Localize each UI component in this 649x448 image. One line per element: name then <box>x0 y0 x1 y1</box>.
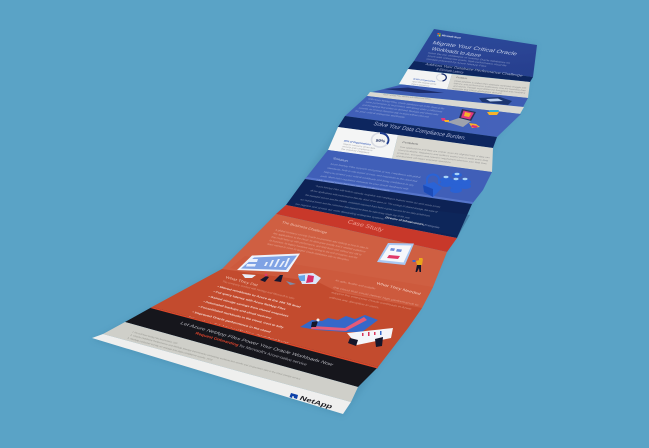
attribution <box>385 216 441 229</box>
solution text: a fully managed service that keeps data safe and always available. <box>316 178 392 192</box>
panel: hero header <box>414 29 537 77</box>
solution text: help you protect your critical workloads and bring confidence to any <box>323 170 416 187</box>
solution text: audit. Meet strict regulatory demands for your Oracle databases with <box>320 174 410 191</box>
problem text <box>452 76 527 95</box>
problem text: cost you dearly. Regulators and auditors expect you to meet every data <box>398 149 489 162</box>
quote text: the managed service and the reliable, consistent response have been a great success for our data architecture, <box>305 193 432 218</box>
cta line: Request Onboarding for Microsoft's Azure-native service <box>195 331 308 367</box>
stat text <box>411 77 437 88</box>
panel: footnotes: 3. NetApp customer survey on storage and data compliance results, 2019 <box>127 336 214 361</box>
folded infographic page <box>92 29 537 414</box>
logo: NetApp: NetApp <box>298 394 335 410</box>
needed text <box>329 279 420 311</box>
subtitle: Azure with enterprise-grade, high-performance cloud file <box>427 54 508 67</box>
subtitle: Solve the top challenges of running Oracle databases on <box>427 51 512 65</box>
body text: its business. Its legacy hardware was coming to the end of support, and the <box>269 239 359 259</box>
body text: for your critical enterprise workloads. <box>355 109 407 119</box>
stat text: security and compliance in <box>342 145 374 152</box>
body text: seconds, so recovery objectives stay on target without extra cost <box>358 106 430 118</box>
stat text: impact operations <box>411 83 431 88</box>
stat text: report slow database queries <box>412 80 437 86</box>
attribution: Director of Infrastructure, <box>385 216 426 226</box>
panel: footnotes <box>103 322 358 402</box>
bullet list: RU numbers: Cut data transfer time, about three hours <box>188 316 290 345</box>
stat text: Report concerns about data <box>343 143 377 150</box>
quote text: our regions and across our most demanding enterprise systems." <box>295 202 386 221</box>
panel: lower orange sheet <box>152 214 447 367</box>
problem text: Cloud adoption is stalled when database workloads struggle with <box>454 80 527 90</box>
panel: performance banner: & Eliminate Latency <box>436 67 465 74</box>
panel: solution <box>305 150 492 204</box>
panel: what they did / needed <box>188 273 422 347</box>
panel: compliance stat and problem <box>328 127 493 172</box>
panel: folded grey strip <box>367 92 524 114</box>
panel: performance banner <box>408 61 533 82</box>
problem text: Problem <box>456 76 469 80</box>
bullet list: • Automated backups and cloud recovery <box>203 300 273 320</box>
panel: performance stat and problem <box>399 69 530 98</box>
panel: case study banner: Case Study <box>346 219 385 233</box>
icon: donut <box>436 74 446 81</box>
title: Workloads to Azure <box>430 47 483 59</box>
body text: same performance as on-premises, with latency under a millisecond <box>365 100 443 113</box>
solution text: Azure NetApp Files supports encryption at rest, compliance with global <box>330 162 422 179</box>
needed text: support the enterprise Oracle workloads in Azure <box>331 291 413 311</box>
bullet list: • Cut query latency with Azure NetApp Files <box>213 290 287 311</box>
quote text: our regional teams and the customers that depend on them for data every single day of the year. <box>300 198 412 219</box>
illustration: presenter <box>412 258 423 272</box>
quote text <box>295 184 442 221</box>
bullet list: • Moved workloads to Azure at the 100 TB level <box>217 285 302 309</box>
logo label: Microsoft Azure <box>441 34 462 39</box>
body text: and throughput that scales on demand. Backups and clones take <box>362 103 440 116</box>
body text: team wanted to move its largest Oracle databases with no disruption. <box>267 242 351 262</box>
problem text <box>396 141 491 165</box>
problem text: latency, and performance bottlenecks cost the business time <box>453 82 527 92</box>
stat text: 90% of Organizations <box>343 139 372 146</box>
solution text <box>316 162 422 192</box>
solution heading: Solution <box>332 157 349 163</box>
body text: key applications to the cloud. Its data grew quickly and it needed a platform <box>273 232 367 253</box>
panel: business challenge <box>237 220 423 272</box>
bullet list <box>188 280 302 345</box>
illustration: strip graphic <box>479 97 512 105</box>
panel: call to action <box>125 307 378 387</box>
problem text: response that critical applications demand. <box>452 87 503 95</box>
icon: laptop <box>441 109 499 128</box>
bullet list: • Gained storage savings from shared snapshots <box>208 295 290 318</box>
heading: what they needed: What They Needed <box>376 281 422 296</box>
body text <box>355 97 446 119</box>
panel: compliance banner <box>338 116 497 148</box>
heading: The Business Challenge <box>281 220 328 235</box>
panel: performance banner: Address Your Database Performance Challenge <box>425 62 524 77</box>
icon: 90% donut <box>372 133 389 147</box>
heading: what they did: What They Did <box>225 275 259 287</box>
needed text: An agile, flexible and scalable <box>335 279 377 290</box>
title: Migrate Your Critical Oracle <box>431 41 519 57</box>
cta headline: Let Azure NetApp Files Power Your Oracle Workloads Now <box>179 321 334 368</box>
illustration: tablet <box>377 243 414 265</box>
problem text: and money. Storage must deliver the throughput and consistent <box>453 85 526 95</box>
body text: With Azure NetApp Files, Oracle databases run in the cloud at the <box>368 97 446 110</box>
problem text: Problem <box>402 141 419 146</box>
bullet list: • Improved Oracle performance in the cloud <box>192 310 272 334</box>
page shadow <box>92 29 537 416</box>
icon: NetApp mark <box>290 393 298 399</box>
icon: lock and data stacks <box>423 172 471 197</box>
problem text: Your applications and data are critical. Even the slightest loss of data can <box>399 146 491 159</box>
small people row <box>242 273 321 285</box>
stat text <box>341 139 377 154</box>
body text <box>267 228 370 262</box>
panel: compliance banner: Solve Your Data Compliance Burden. <box>372 121 468 141</box>
stat text: the cloud for Database <box>341 148 371 154</box>
needed text: without any disruption to users. <box>329 296 381 309</box>
problem text: protection, encryption and retention requirement wherever your data lives, <box>397 152 488 165</box>
panel: blue body <box>345 96 521 137</box>
bullet list: The company worked with NetApp and Microsoft to take <box>222 280 296 300</box>
needed text: the cloud that could deliver high performance to <box>333 286 420 307</box>
body text: A global company running Oracle on-premises was looking at how to take its <box>275 228 370 250</box>
panel: folded grey strip: Azure NetApp Files delivers sub-millisecond latency <box>383 93 432 101</box>
stat text: 99.99% of Organizations <box>413 77 437 83</box>
icon: 90% donut: 90% <box>375 138 386 143</box>
quote text: all our applications with performance that the cloud never gave us. The savings of shared storage, the ease of <box>310 189 439 213</box>
panel: folded blue strip <box>372 84 528 107</box>
what they did background <box>152 269 422 367</box>
problem text: and downtime will impact enterprise operations. <box>396 155 452 164</box>
panel: footnotes: 2. Oracle Database Performance and NetApp Storage Benchmarks comparing workload test results and on-premises data in the cloud storage service <box>130 333 302 381</box>
panel: footnotes: 1. Microsoft Azure NetApp Files documentation, 2019 <box>132 330 179 345</box>
illustration: dashboard board <box>237 254 300 272</box>
panel: dark quote <box>286 179 472 238</box>
panel: footer with logo <box>92 334 351 414</box>
panel: case study banner <box>276 205 457 252</box>
subtitle: storage powered by Azure NetApp Files <box>426 57 488 68</box>
attribution: Enterprise <box>424 223 441 229</box>
subtitle <box>426 51 512 68</box>
quote text: "Azure NetApp Files with built-in capacity, snapshot, and compliance features meets our strict needs across <box>315 184 442 209</box>
bullet list: • Consolidated workloads in the cloud, Cost to fully <box>198 305 285 329</box>
illustration: growth chart <box>300 315 393 347</box>
solution text: standards, built-in role-based access, and snapshots in the cloud that <box>327 166 419 183</box>
icon: Microsoft logo <box>437 33 441 36</box>
body text: that could keep up with performance, and hold down cost without any risk to <box>271 235 363 256</box>
